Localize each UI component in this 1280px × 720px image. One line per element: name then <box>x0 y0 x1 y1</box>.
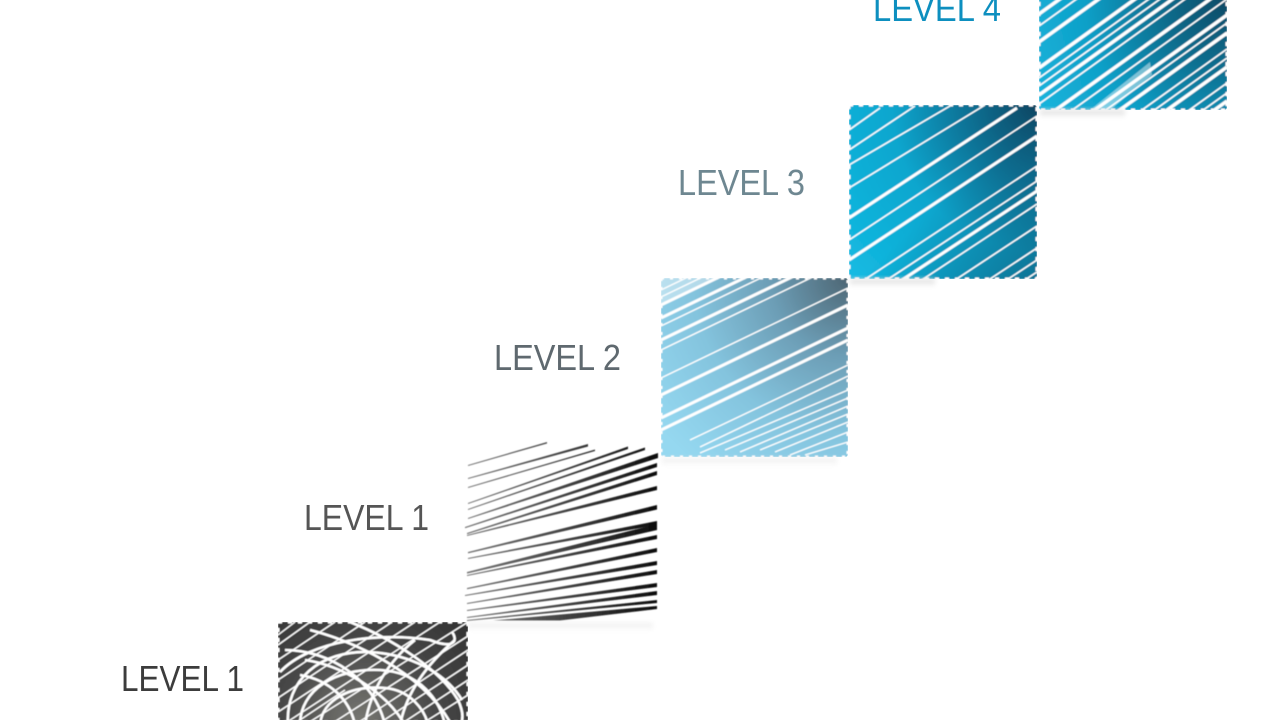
shadow: level 4 <box>1040 110 1125 118</box>
shadow: level 1 <box>468 623 653 631</box>
label: level 2: LEVEL 2 <box>494 337 621 378</box>
label: level 1 upper: LEVEL 1 <box>304 497 429 538</box>
step: level 2 scribble square <box>661 278 848 457</box>
shadow: level 2 <box>662 458 837 466</box>
label: level 3: LEVEL 3 <box>678 162 805 203</box>
step: level 1 tangled scribble square <box>278 622 468 720</box>
step: level 3 scribble square <box>849 105 1037 279</box>
shadow: level 3 <box>850 279 935 287</box>
step: level 4 scribble square <box>1039 0 1227 110</box>
step: level 1 pen strokes <box>465 442 658 621</box>
label: level 1 lower: LEVEL 1 <box>121 658 244 699</box>
